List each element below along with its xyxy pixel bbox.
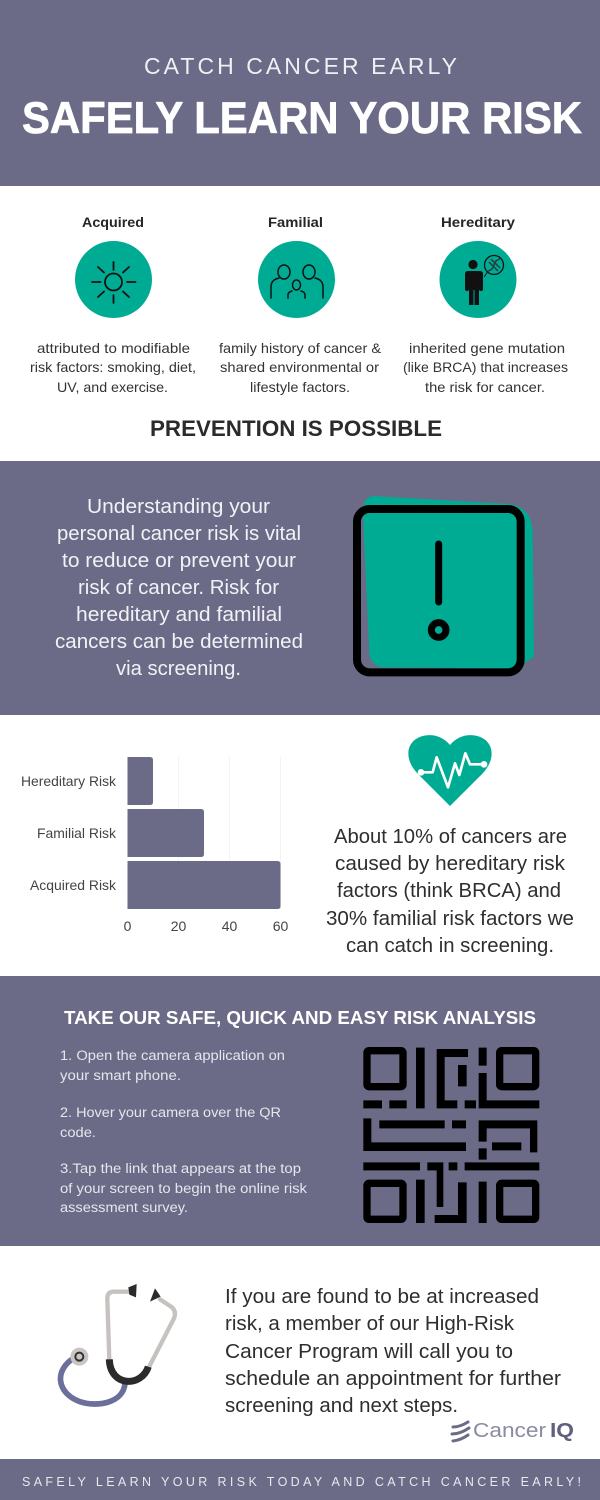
text block: understanding risk: risk of cancer. Risk for [78,577,279,599]
text block: understanding risk: hereditary and familial [76,604,282,626]
text block: hereditary statistics: can catch in screening. [346,935,554,957]
category labels [21,773,117,893]
description: familial [219,340,382,395]
text block: high-risk program: If you are found to be at increased [225,1286,539,1308]
description: acquired: attributed to modifiable [37,340,190,356]
text block: high-risk program: Cancer Program will call you to [225,1341,513,1363]
text block: hereditary statistics: 30% familial risk factors we [326,908,574,930]
heading: familial: Familial [268,214,323,230]
panel: acquired risk [30,214,196,395]
text block: understanding risk: via screening. [116,658,241,680]
text block: step 3: 3.Tap the link that appears at the top [60,1161,301,1176]
axis labels: 20 [171,918,186,934]
icon: sun [75,241,152,318]
description: acquired: UV, and exercise. [57,379,168,395]
bar: hereditary [128,757,153,805]
axis labels: 0 [124,918,132,934]
logo: CancerIQ [452,1419,574,1442]
text block: understanding risk: personal cancer risk is vital [57,523,301,545]
icon: family [258,241,335,318]
icon: QR code [363,1048,539,1223]
icon: person with dna bubble [440,241,516,318]
text block: hereditary statistics: factors (think BRCA) and [337,880,561,902]
description: hereditary [403,340,568,395]
panel: familial risk [219,214,382,395]
description: familial: shared environmental or [220,359,379,375]
axis labels: 60 [273,918,288,934]
panel: hereditary risk [403,214,568,395]
text block: step 2: 2. Hover your camera over the QR [60,1105,281,1120]
text block: step 1 [60,1048,285,1083]
logo: CancerIQ: IQ [550,1419,574,1442]
heading: take our risk analysis: TAKE OUR SAFE, QUICK AND EASY RISK ANALYSIS [64,1008,536,1028]
description: hereditary: (like BRCA) that increases [403,359,568,375]
text block: understanding risk: Understanding your [87,496,270,518]
icon: stethoscope [60,1284,175,1404]
text block: hereditary statistics: About 10% of cancers are [334,826,567,848]
description: acquired [30,340,196,395]
panel: risk analysis [0,976,600,1500]
logo: CancerIQ: Cancer [473,1419,546,1442]
text block: high-risk program: risk, a member of our High-Risk [225,1313,515,1335]
text block: hereditary statistics [326,826,574,957]
text block: high-risk program: screening and next steps. [225,1395,458,1417]
text block: understanding risk [55,496,303,680]
description: hereditary: the risk for cancer. [425,379,545,395]
text block: hereditary statistics: caused by hereditary risk [335,853,566,875]
text block: step 3: assessment survey. [60,1200,188,1215]
bar: acquired [128,861,280,909]
icon: exclamation alert [357,496,534,672]
description: familial: family history of cancer & [219,340,382,356]
axis labels: 40 [222,918,237,934]
description: acquired: risk factors: smoking, diet, [30,359,196,375]
text block: step 3 [60,1161,307,1215]
text block: understanding risk: cancers can be determined [55,631,303,653]
text block: step 2 [60,1105,281,1140]
heading: acquired: Acquired [82,214,144,230]
icon: heart with pulse [408,735,492,806]
footer banner: SAFELY LEARN YOUR RISK TODAY AND CATCH CANCER EARLY! [22,1475,581,1489]
category labels: Familial Risk [37,825,117,841]
bar chart: risk breakdown [21,757,288,934]
bar: familial [128,809,204,857]
text block: step 1: your smart phone. [60,1068,181,1083]
category labels: Hereditary Risk [21,773,117,789]
category labels: Acquired Risk [30,877,117,893]
axis labels [124,918,288,934]
text block: step 1: 1. Open the camera application on [60,1048,285,1063]
text block: understanding risk: to reduce or prevent your [62,550,296,572]
text block: step 2: code. [60,1125,96,1140]
description: familial: lifestyle factors. [250,379,350,395]
heading: hereditary: Hereditary [441,214,515,230]
header banner [0,0,600,186]
text block: step 3: of your screen to begin the online risk [60,1181,307,1196]
text block: high-risk program [225,1286,561,1417]
main title: SAFELY LEARN YOUR RISK [22,94,582,143]
text block: high-risk program: schedule an appointment for further [225,1368,561,1390]
heading: prevention is possible: PREVENTION IS POSSIBLE [150,416,442,441]
title kicker: CATCH CANCER EARLY [144,53,457,79]
description: hereditary: inherited gene mutation [409,340,565,356]
panel: understanding your risk [0,461,600,715]
footer banner [0,1459,600,1500]
